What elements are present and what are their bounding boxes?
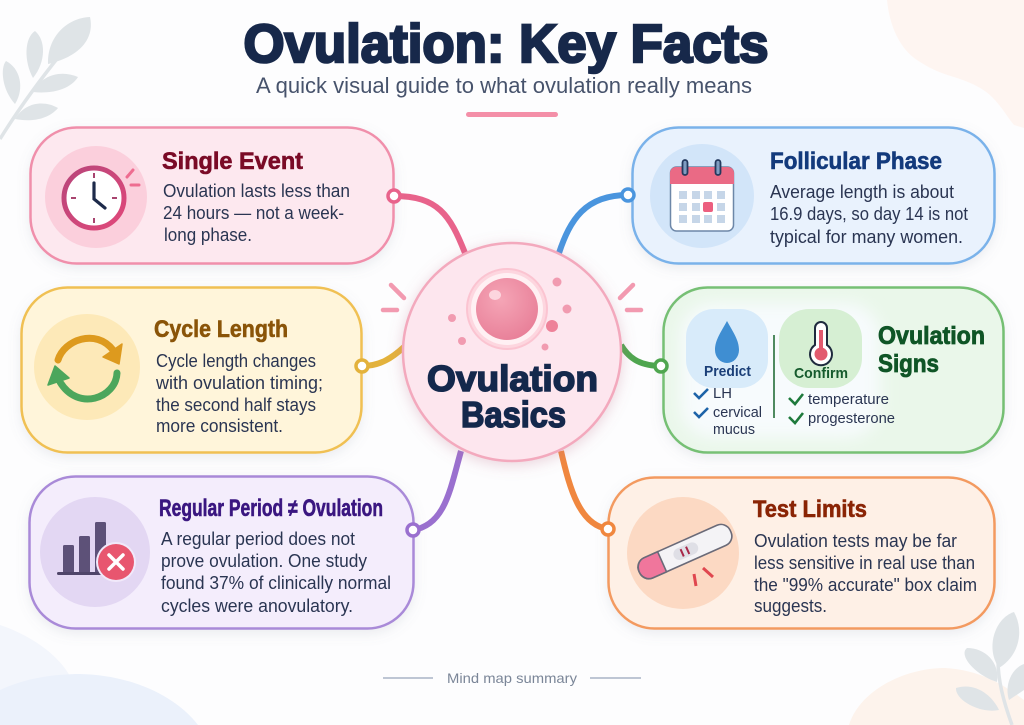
body text: the "99% accurate" box claim bbox=[754, 575, 977, 595]
connector: test limits bbox=[561, 451, 608, 529]
body text: suggests. bbox=[754, 596, 827, 616]
panel: test limits bbox=[602, 478, 994, 628]
card background bbox=[664, 288, 1004, 452]
card background bbox=[30, 476, 414, 628]
body text: prove ovulation. One study bbox=[161, 551, 367, 571]
confirm checklist bbox=[789, 391, 895, 427]
panel: cycle length bbox=[22, 288, 368, 452]
card background bbox=[632, 128, 994, 264]
icon: bar chart with cross bbox=[40, 497, 150, 607]
body text: with ovulation timing; bbox=[155, 373, 323, 393]
heading: Signs bbox=[878, 350, 939, 378]
connector node bbox=[602, 523, 614, 535]
background blob: bottom right bbox=[849, 668, 1024, 725]
icon: thermometer bbox=[810, 322, 832, 365]
heading: Test Limits bbox=[753, 496, 867, 523]
card background bbox=[608, 478, 994, 628]
body text: long phase. bbox=[164, 225, 252, 245]
body text: 24 hours — not a week- bbox=[163, 203, 344, 223]
body text: the second half stays bbox=[156, 395, 316, 415]
panel: ovulation signs bbox=[655, 288, 1004, 452]
connector node bbox=[388, 190, 400, 202]
panel: follicular phase bbox=[622, 128, 994, 264]
predict badge bbox=[686, 309, 768, 388]
decorative leaf sprig: bottom right bbox=[956, 612, 1024, 725]
body text bbox=[754, 531, 977, 616]
predict checklist: mucus bbox=[713, 421, 755, 438]
hub circle bbox=[403, 243, 621, 461]
icon: water drop bbox=[715, 321, 739, 363]
inner glow bbox=[680, 303, 880, 438]
icon: egg cell bbox=[448, 269, 572, 350]
title: Ovulation: Key Facts bbox=[244, 14, 768, 74]
body text: Cycle length changes bbox=[156, 351, 316, 371]
body text: typical for many women. bbox=[770, 227, 963, 247]
body text: 16.9 days, so day 14 is not bbox=[770, 204, 968, 224]
decorative leaf sprig: top left bbox=[0, 17, 91, 139]
body text: found 37% of clinically normal bbox=[161, 573, 391, 593]
title underline bbox=[466, 112, 558, 117]
predict checklist bbox=[694, 385, 762, 438]
background blob: top right bbox=[887, 0, 1024, 128]
confirm badge bbox=[779, 309, 862, 388]
connector: ovulation signs bbox=[621, 345, 662, 366]
body text bbox=[770, 182, 968, 247]
hub title bbox=[427, 358, 598, 435]
body text: Ovulation tests may be far bbox=[754, 531, 957, 551]
body text bbox=[163, 181, 350, 245]
heading bbox=[878, 322, 985, 378]
connector: regular period bbox=[413, 451, 461, 530]
body text: Ovulation lasts less than bbox=[163, 181, 350, 201]
heading: Regular Period ≠ Ovulation bbox=[159, 495, 383, 522]
connector node bbox=[655, 360, 667, 372]
body text: cycles were anovulatory. bbox=[161, 596, 353, 616]
predict checklist: cervical bbox=[713, 404, 762, 421]
confirm checklist: progesterone bbox=[808, 410, 895, 427]
connector node bbox=[356, 360, 368, 372]
icon: calendar bbox=[650, 144, 754, 248]
card background bbox=[30, 128, 394, 264]
heading: Cycle Length bbox=[154, 316, 288, 343]
center hub: ovulation basics bbox=[403, 243, 621, 461]
sparkle: right of hub bbox=[620, 285, 641, 310]
connector node bbox=[622, 189, 634, 201]
divider bbox=[773, 335, 775, 418]
connector: single event bbox=[394, 196, 465, 253]
body text: less sensitive in real use than bbox=[754, 553, 975, 573]
footer: mind map summary: Mind map summary bbox=[447, 670, 577, 686]
panel: single event bbox=[30, 128, 400, 264]
heading: Ovulation bbox=[878, 322, 985, 350]
confirm checklist: temperature bbox=[808, 391, 889, 408]
connector: follicular phase bbox=[559, 195, 628, 253]
icon: clock bbox=[45, 146, 147, 248]
card background bbox=[22, 288, 362, 452]
subtitle: A quick visual guide to what ovulation really means bbox=[256, 73, 752, 98]
body text bbox=[161, 529, 391, 616]
hub title: Basics bbox=[461, 394, 566, 435]
connector node bbox=[407, 524, 419, 536]
icon: ovulation test stick bbox=[627, 497, 739, 609]
heading: Single Event bbox=[162, 148, 303, 175]
label: predict: Predict bbox=[704, 363, 751, 380]
heading: Follicular Phase bbox=[770, 148, 942, 175]
body text bbox=[155, 351, 323, 436]
body text: A regular period does not bbox=[161, 529, 355, 549]
sparkle: left of hub bbox=[383, 285, 404, 310]
icon: cycle arrows bbox=[34, 314, 140, 420]
hub title: Ovulation bbox=[427, 358, 598, 399]
panel: regular period bbox=[30, 476, 419, 628]
label: confirm: Confirm bbox=[794, 365, 848, 382]
background blob: bottom left rear bbox=[0, 625, 84, 725]
body text: more consistent. bbox=[156, 416, 283, 436]
predict checklist: LH bbox=[713, 385, 732, 402]
connector: cycle length bbox=[362, 347, 404, 366]
body text: Average length is about bbox=[770, 182, 954, 202]
background blob: bottom left front bbox=[0, 674, 198, 725]
